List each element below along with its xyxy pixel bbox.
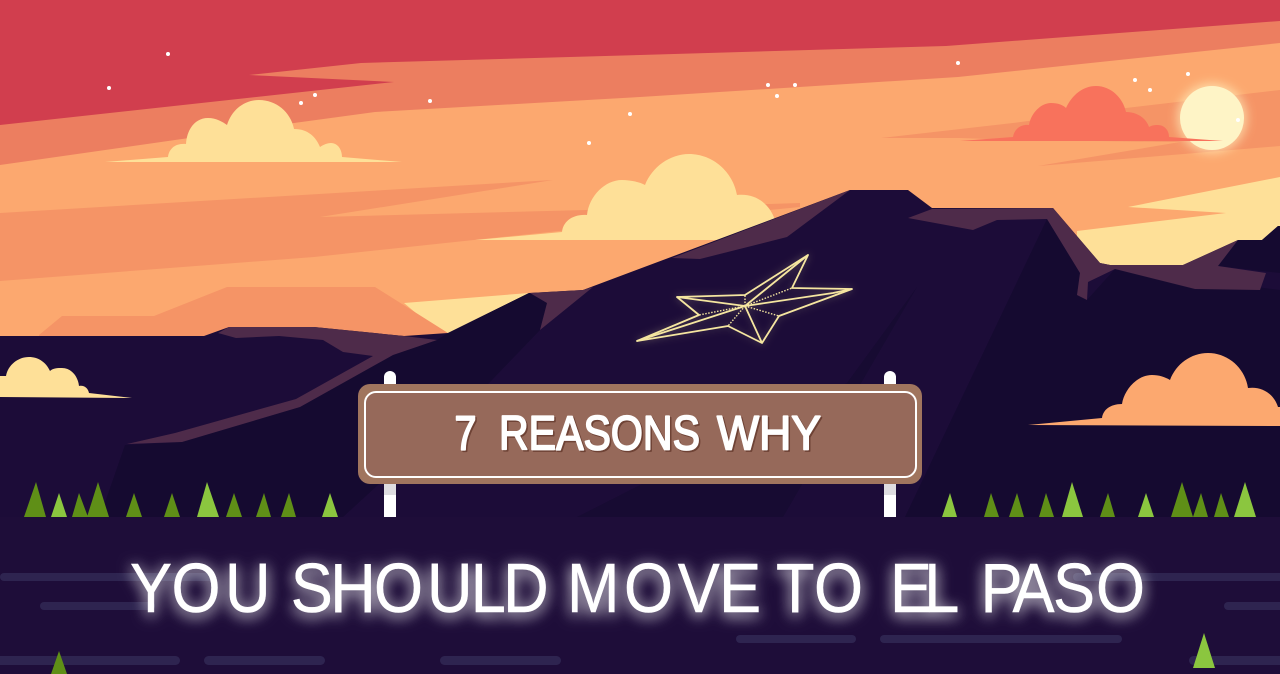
distant mesa	[39, 287, 448, 340]
title: MOVE	[567, 550, 761, 628]
title: TO	[776, 550, 863, 628]
sign board	[358, 384, 922, 484]
tree: foreground right	[1193, 633, 1215, 668]
ground dashes	[0, 573, 1280, 665]
trees: left row	[24, 482, 338, 517]
sign heading: 7	[456, 409, 478, 462]
tree: foreground left	[51, 651, 67, 674]
sign posts	[384, 371, 896, 517]
star on the mountain	[637, 255, 852, 343]
title: PASO	[980, 550, 1145, 628]
mountains	[0, 190, 1280, 674]
sign heading	[454, 408, 822, 462]
sign heading: WHY	[718, 409, 822, 462]
title: YOU	[130, 550, 270, 628]
cloud: left over ground	[0, 357, 132, 398]
cloud: right over ground	[1028, 353, 1280, 426]
ground band	[0, 517, 1280, 674]
sign heading: WHY	[717, 408, 821, 460]
title	[130, 550, 1145, 628]
sign heading: REASONS	[499, 408, 700, 460]
sign	[358, 371, 922, 517]
sign heading: REASONS	[500, 409, 702, 462]
sun	[1177, 83, 1247, 153]
trees: right row	[942, 482, 1256, 517]
stars	[107, 52, 1190, 145]
title: SHOULD	[291, 550, 549, 628]
cloud: top left	[105, 100, 402, 162]
sign heading: 7	[454, 408, 476, 460]
cloud: centre behind mountain	[475, 154, 775, 240]
title: EL	[890, 550, 959, 628]
cloud: red by the sun	[960, 86, 1223, 141]
